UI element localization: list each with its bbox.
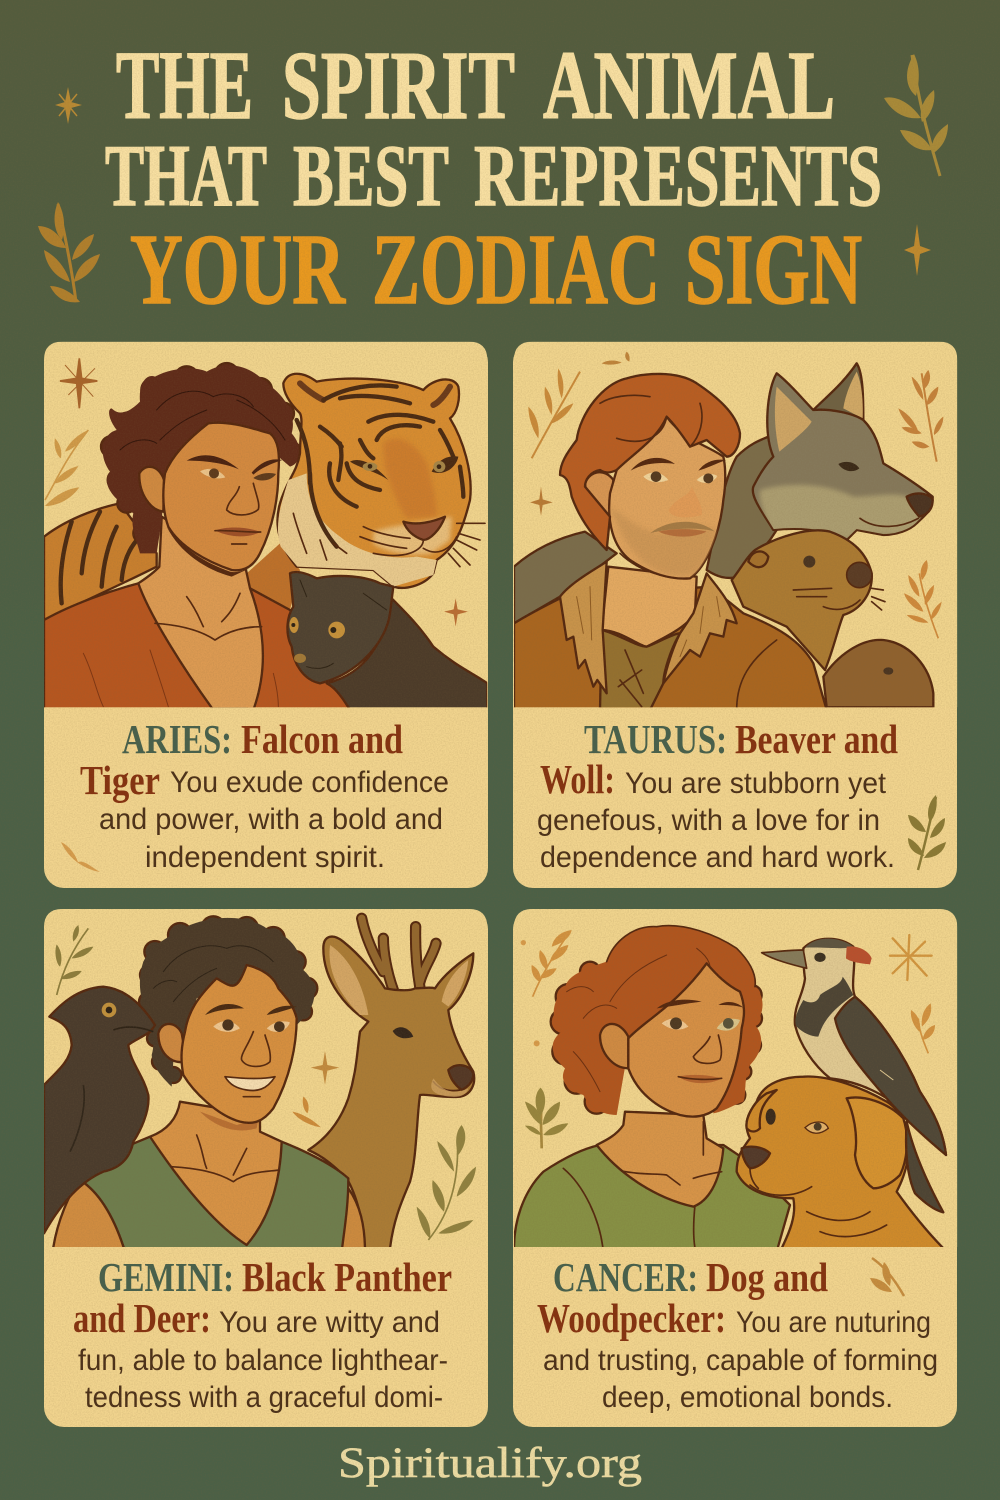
deer (308, 918, 474, 1248)
creature lower right (823, 640, 933, 707)
wolf body (514, 532, 617, 623)
text: cancer (537, 1254, 938, 1414)
icon: sprig top left (55, 925, 93, 995)
beaver (732, 530, 885, 670)
icon: olive sprig (908, 795, 946, 870)
brows and eyes (187, 455, 282, 475)
icon: sprig top right (884, 54, 948, 176)
title: YOUR (130, 213, 346, 325)
shirt (514, 1145, 790, 1252)
illustration: man with tiger and panther (44, 342, 487, 710)
text: aries: independent spirit. (145, 841, 385, 874)
shirt (44, 583, 350, 710)
brows and eyes (657, 1000, 743, 1008)
icon: sprig right (911, 1003, 935, 1053)
icon: dots (521, 940, 540, 1046)
text: taurus: TAURUS: (584, 716, 727, 762)
panel: aries (44, 342, 488, 888)
icon: top flecks (602, 352, 630, 365)
icon: small sprig (870, 1258, 904, 1296)
raven (44, 987, 155, 1233)
right arm (340, 1188, 365, 1252)
footer: source: Spiritualify.org (338, 1440, 642, 1487)
nose and mouth (227, 483, 259, 515)
hair (139, 916, 317, 1087)
text: cancer: CANCER: (553, 1254, 698, 1300)
neck (602, 567, 697, 647)
ear (586, 471, 614, 512)
illustration: woman with dog and woodpecker (514, 909, 957, 1252)
woodpecker (762, 939, 946, 1212)
text: aries: ARIES: (122, 716, 232, 762)
text: cancer: You are nuturing (736, 1306, 931, 1339)
text: taurus (537, 716, 898, 874)
tank top (80, 1137, 348, 1252)
icon: sprig right (898, 370, 943, 462)
icon: small leaf (61, 842, 100, 872)
icon: star (311, 1051, 339, 1085)
icon: sprig left (528, 368, 580, 458)
text: aries: You exude confidence (170, 766, 449, 799)
eyes and brows (631, 458, 726, 471)
ear (139, 467, 164, 512)
shirt and laces (600, 630, 680, 710)
tiger (277, 374, 485, 588)
hair (101, 363, 301, 553)
text: cancer: and trusting, capable of forming (543, 1344, 938, 1377)
title: BEST (293, 128, 449, 225)
hair (560, 374, 740, 550)
icon: star (60, 358, 97, 408)
text: aries (80, 716, 449, 874)
text: gemini: You are witty and (219, 1306, 440, 1339)
text: taurus: dependence and hard work. (540, 841, 895, 874)
icon: star right (890, 935, 932, 980)
panther (287, 572, 487, 710)
title: SPIRIT (282, 32, 515, 140)
icon: star (530, 487, 553, 516)
panel: gemini (44, 909, 488, 1427)
text: aries: Falcon and (241, 716, 403, 762)
icon: olive sprig right (417, 1125, 476, 1240)
neck and chest (138, 517, 263, 710)
text: aries: and power, with a bold and (99, 803, 443, 836)
text: cancer: Dog and (706, 1254, 828, 1300)
text: gemini (73, 1254, 452, 1414)
face (609, 417, 725, 579)
text: gemini: Black Panther (242, 1254, 452, 1300)
icon: flecks (292, 1097, 321, 1127)
chest and neck (150, 1102, 282, 1245)
text: gemini: tedness with a graceful domi- (85, 1381, 443, 1414)
illustration: man with wolf and beaver (514, 342, 957, 710)
icon: star right (904, 224, 931, 276)
title: ZODIAC (372, 213, 660, 325)
text: gemini: fun, able to balance lighthear- (78, 1344, 448, 1377)
neck and chest (597, 1112, 723, 1207)
jacket (514, 587, 827, 710)
panel: cancer (513, 909, 957, 1427)
wolf head (753, 363, 933, 540)
icon: olive plant (525, 1088, 568, 1148)
face (163, 423, 279, 570)
text: taurus: You are stubborn yet (625, 767, 886, 800)
face (182, 965, 297, 1123)
illustration: man with raven and deer (44, 909, 487, 1252)
ear (158, 1024, 187, 1062)
left arm (53, 1180, 125, 1252)
text: cancer: Woodpecker: (537, 1295, 726, 1341)
fur collar (560, 562, 737, 693)
icon: small star (444, 598, 468, 627)
title: THE (116, 32, 253, 140)
title: ANIMAL (543, 32, 835, 140)
dog (737, 1077, 947, 1252)
hair back (551, 926, 763, 1115)
title: SIGN (685, 213, 862, 325)
title: THAT (105, 128, 267, 225)
tiger pelt (44, 503, 300, 620)
title (105, 32, 882, 325)
icon: star top left (55, 87, 82, 124)
text: aries: Tiger (80, 757, 160, 803)
text: gemini: and Deer: (73, 1295, 211, 1341)
panel: taurus (513, 342, 957, 888)
ear (600, 1024, 628, 1068)
face (628, 963, 744, 1117)
text: taurus: Woll: (540, 756, 615, 802)
text: gemini: GEMINI: (98, 1254, 234, 1300)
text: taurus: Beaver and (735, 716, 898, 762)
icon: sprig (45, 430, 88, 506)
icon: sprig left (38, 202, 100, 302)
brows and eyes (205, 1004, 297, 1015)
icon: sprig right lower (904, 560, 942, 638)
text: cancer: deep, emotional bonds. (602, 1381, 893, 1414)
icon: sprig top left (532, 930, 572, 997)
text: taurus: genefous, with a love for in (537, 804, 880, 837)
